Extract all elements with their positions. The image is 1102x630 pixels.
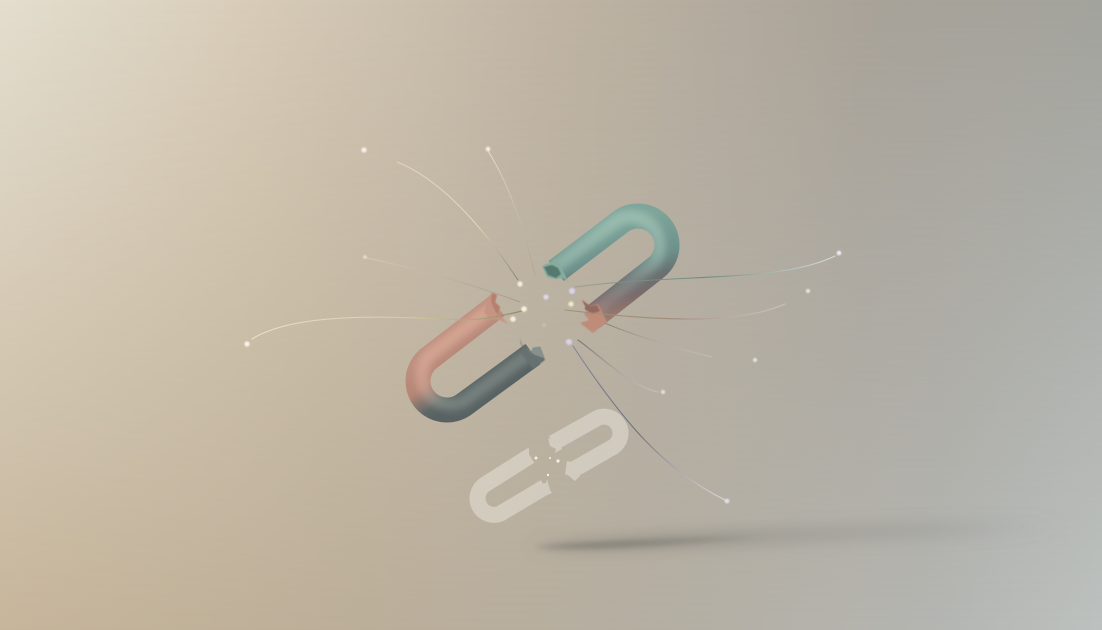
center spark dots — [510, 281, 575, 345]
spark line short lower right — [578, 340, 658, 392]
ghost link lower half — [477, 448, 552, 515]
ghost link upper half — [548, 417, 621, 481]
torn end pink — [580, 300, 607, 333]
spark line left long — [252, 311, 522, 339]
lower left link half — [418, 293, 545, 410]
torn end grey — [520, 338, 545, 369]
torn end pink — [484, 293, 508, 324]
tube body — [418, 304, 533, 410]
spark lines in front — [252, 256, 835, 500]
tube body — [554, 216, 667, 318]
torn end teal — [542, 258, 568, 281]
spark line right long — [575, 256, 835, 287]
spark line right middle — [565, 304, 785, 319]
ghost reflection of broken link — [477, 417, 621, 515]
outer spark dots — [244, 147, 841, 503]
spark line left faint — [367, 258, 520, 302]
ghost sparks — [534, 456, 560, 476]
upper right link half — [542, 216, 667, 333]
spark line right far lower — [602, 322, 712, 357]
ground shadow — [530, 522, 1065, 548]
spark line top — [488, 151, 535, 275]
spark line long lower right — [573, 346, 725, 500]
spark line upper left — [397, 162, 518, 280]
spark lines — [367, 151, 712, 357]
